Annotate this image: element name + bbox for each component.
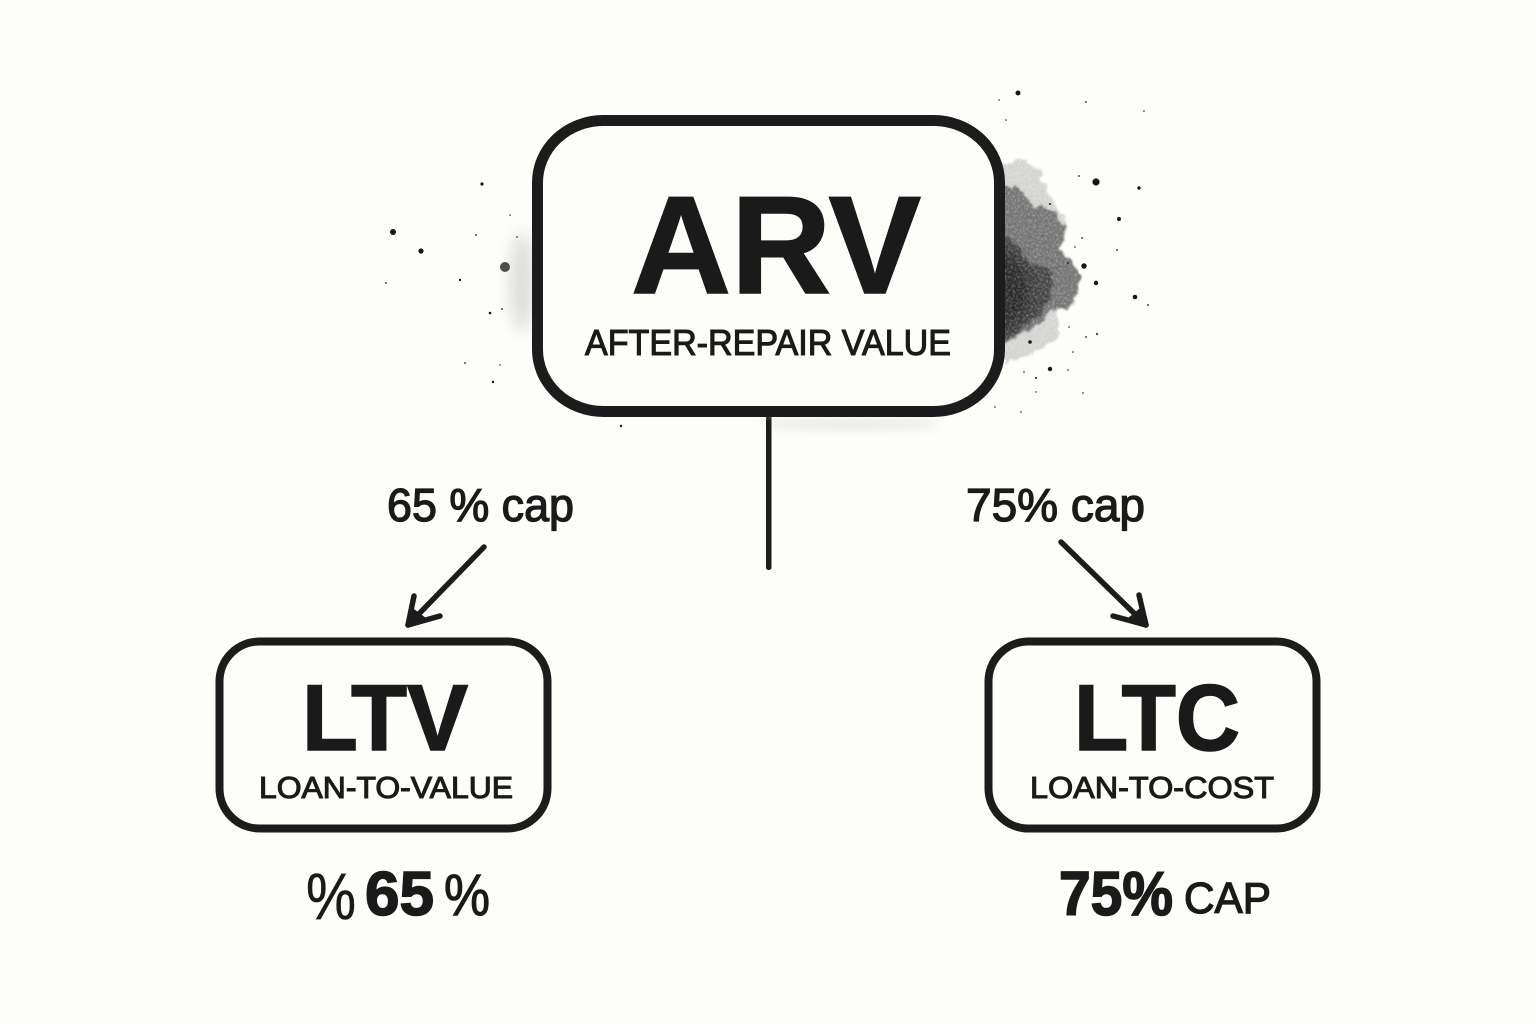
ARV box <box>538 120 1000 412</box>
LTC box outline <box>988 642 1316 828</box>
LTC heading: LTC <box>1074 665 1240 770</box>
LTC subtitle: LOAN-TO-COST <box>1030 770 1274 805</box>
LTV heading: LTV <box>302 665 468 770</box>
arrow to LTC <box>1061 542 1146 625</box>
LTV bottom figure <box>306 859 490 933</box>
faint smudge below the ARV box <box>760 418 940 430</box>
LTC bottom figure <box>1059 860 1271 929</box>
smudge on the left of the ARV box <box>510 232 534 332</box>
label: 75% cap: 75% cap <box>966 479 1145 531</box>
LTC box <box>988 642 1316 828</box>
arrow to LTV <box>408 547 484 625</box>
ARV box outline <box>538 120 1000 412</box>
ink speckles <box>385 90 1149 427</box>
75 percent value: 75% <box>1059 860 1173 929</box>
LTV subtitle: LOAN-TO-VALUE <box>259 770 513 805</box>
trailing percent sign: % <box>444 863 490 928</box>
CAP word: CAP <box>1184 874 1271 923</box>
LTV box outline <box>220 642 548 828</box>
connector stem from ARV box <box>766 412 772 570</box>
ink blot on the right of the ARV box <box>1000 160 1080 364</box>
leading percent sign: % <box>306 859 356 933</box>
ARV subtitle: AFTER-REPAIR VALUE <box>585 322 951 363</box>
65 value: 65 <box>365 860 434 929</box>
LTV box <box>220 642 548 828</box>
ARV heading: ARV <box>631 168 921 323</box>
label: 65% cap: 65 % cap <box>387 479 574 531</box>
